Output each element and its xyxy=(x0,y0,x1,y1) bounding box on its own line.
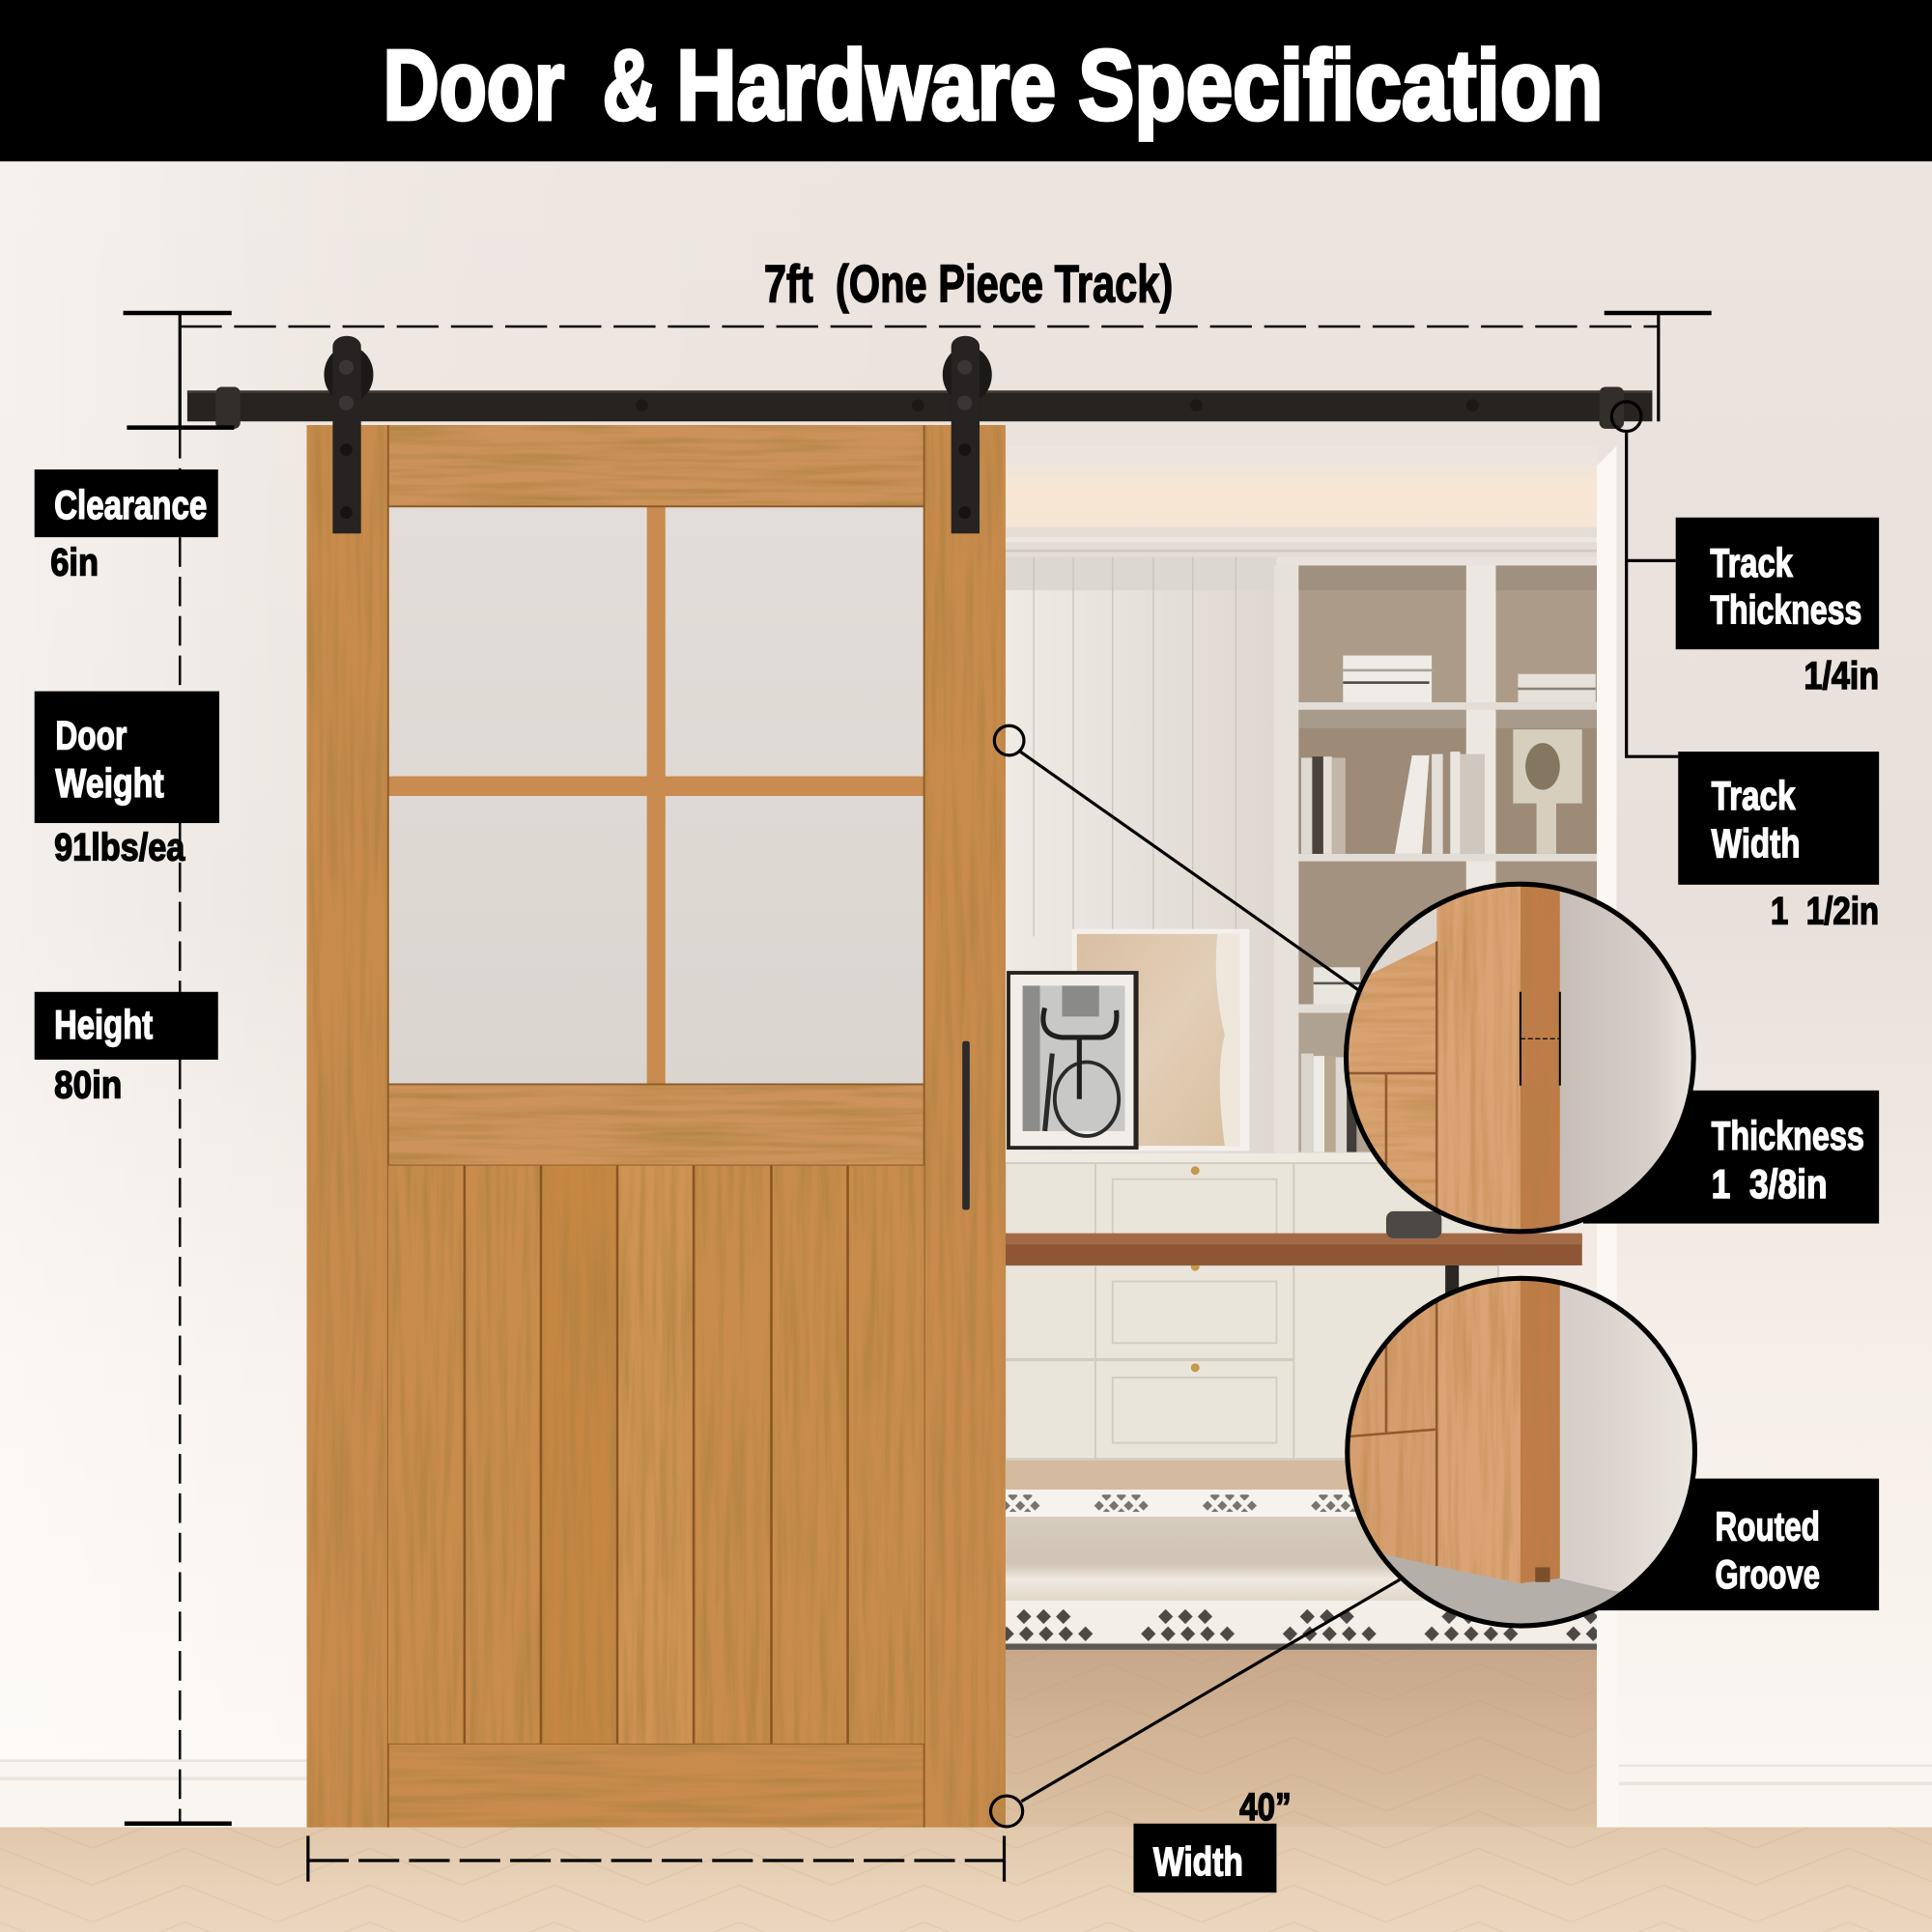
label: Thickness box: 1 3/8in xyxy=(1712,1161,1828,1207)
opening ceiling and glow xyxy=(1006,446,1597,557)
value: 1/4in: 1/4in xyxy=(1804,655,1879,697)
door width dimension line xyxy=(308,1836,1005,1882)
baseboards xyxy=(0,1759,1932,1829)
label: Height xyxy=(35,992,218,1060)
bicycle photo frame xyxy=(1007,971,1139,1150)
abstract art frame xyxy=(1072,929,1249,1151)
title banner xyxy=(0,0,1932,161)
value: 40 inches: 40” xyxy=(1239,1786,1292,1829)
right hanger xyxy=(943,336,992,533)
label: Door Weight: Door xyxy=(55,713,127,758)
label: Width xyxy=(1133,1824,1276,1892)
magnifier: door thickness xyxy=(1346,884,1695,1233)
label: Height: Height xyxy=(54,1002,153,1047)
door stiles xyxy=(307,425,1006,1828)
magnifier: routed groove xyxy=(1347,1278,1696,1628)
table with cup xyxy=(1006,1211,1582,1296)
value: 1 1/2in: 1 1/2in xyxy=(1771,891,1879,933)
books and sculpture xyxy=(1301,656,1596,1152)
title banner: Door xyxy=(384,29,564,141)
wood panel wall xyxy=(1006,557,1276,1163)
label: Thickness box: Thickness xyxy=(1712,1113,1864,1158)
label: Routed Groove box: Routed xyxy=(1716,1503,1820,1548)
barn track xyxy=(187,387,1652,429)
floor xyxy=(0,1828,1932,1932)
door jamb trim xyxy=(1597,446,1616,1821)
bookshelf xyxy=(1274,565,1597,1163)
label: Clearance: Clearance xyxy=(54,482,207,527)
vertical planks xyxy=(388,1166,924,1744)
height dimension line xyxy=(124,313,234,1824)
label: Track Thickness: Track xyxy=(1710,540,1793,585)
label: Door Weight: Weight xyxy=(55,760,164,806)
value: 80in: 80in xyxy=(54,1064,122,1106)
door handle xyxy=(962,1041,970,1210)
label: Routed Groove box: Groove xyxy=(1716,1551,1820,1597)
barn door xyxy=(307,425,1006,1828)
window panes xyxy=(388,506,924,1084)
track length dimension line xyxy=(180,313,1712,421)
label: Width: Width xyxy=(1153,1838,1243,1884)
label: Track Thickness xyxy=(1676,518,1879,649)
label: Clearance xyxy=(35,469,218,537)
value: 6in: 6in xyxy=(50,542,99,584)
interior floor and rug xyxy=(1006,1460,1597,1828)
cabinets xyxy=(1006,1153,1498,1466)
label: Track Thickness: Thickness xyxy=(1710,586,1861,632)
title banner: Specification xyxy=(1078,29,1603,141)
title banner: & xyxy=(603,29,657,141)
label: Door Weight xyxy=(35,692,219,823)
rails xyxy=(388,425,924,1828)
callout leader lines xyxy=(991,402,1678,1827)
label: Routed Groove box xyxy=(1596,1479,1879,1610)
label: Track Width xyxy=(1678,752,1879,885)
label: Track Width: Width xyxy=(1712,821,1801,867)
label: Thickness box xyxy=(1583,1091,1879,1224)
room seen through opening xyxy=(1006,446,1597,1828)
title banner: Hardware xyxy=(676,29,1056,141)
left hanger xyxy=(324,336,373,533)
value: 91lbs/ea: 91lbs/ea xyxy=(54,826,185,868)
track length label: 7ft (One Piece Track) xyxy=(764,253,1173,313)
label: Track Width: Track xyxy=(1712,773,1796,818)
track bumpers xyxy=(215,387,1624,429)
